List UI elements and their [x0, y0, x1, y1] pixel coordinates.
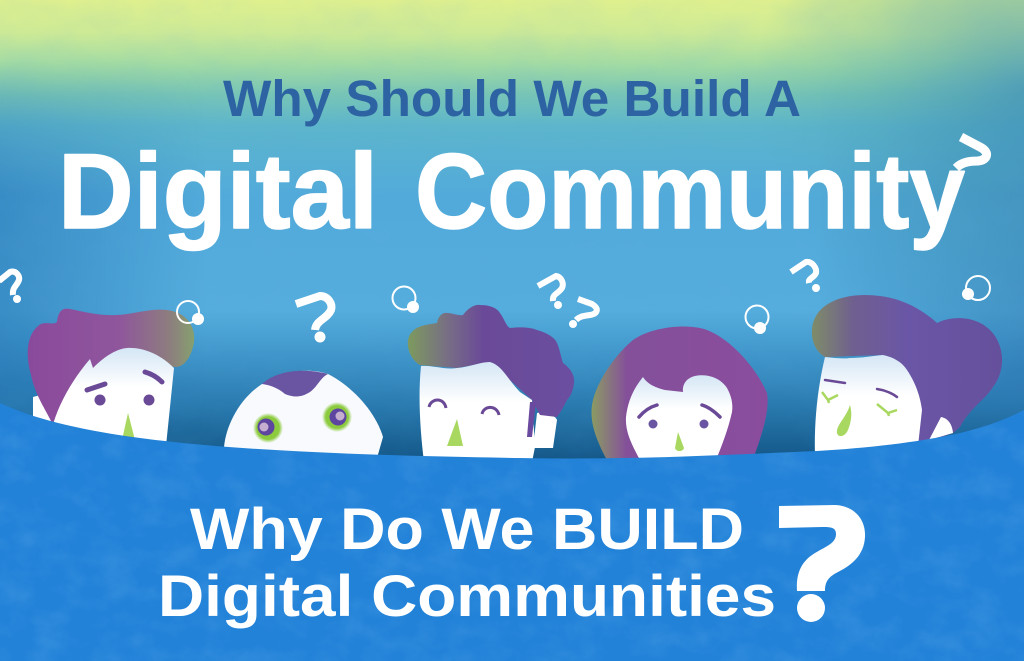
person 4: worried woman	[591, 326, 768, 462]
subtitle line: Digital Communities: Digital Communities	[158, 564, 776, 629]
ring 1	[177, 301, 204, 325]
people group	[28, 295, 1002, 462]
title question mark	[956, 137, 987, 168]
question mark above child	[296, 296, 331, 342]
person 5: woman with hair bun	[812, 295, 1002, 456]
title word: Digital: Digital	[58, 131, 378, 251]
person 1: worried man	[28, 309, 194, 446]
title word: Community: Community	[415, 131, 965, 251]
question mark far left	[0, 272, 21, 303]
question mark above bun woman	[791, 262, 820, 292]
question mark pair right	[569, 299, 597, 328]
ring 4	[962, 276, 990, 300]
person 2: green-eyed child	[224, 371, 383, 458]
front pocket panel	[0, 400, 1024, 661]
ring 2	[392, 286, 419, 313]
large question mark	[779, 505, 865, 622]
small question marks	[0, 262, 820, 342]
person 3: smiling man	[408, 305, 574, 462]
thought rings	[177, 276, 990, 334]
question mark pair left	[538, 276, 563, 309]
background gradient	[0, 0, 1024, 470]
subtitle line: Why Do We BUILD: Why Do We BUILD	[190, 497, 744, 562]
ring 3	[746, 306, 768, 334]
title line: Why Should We Build A: Why Should We Build A	[223, 70, 801, 127]
